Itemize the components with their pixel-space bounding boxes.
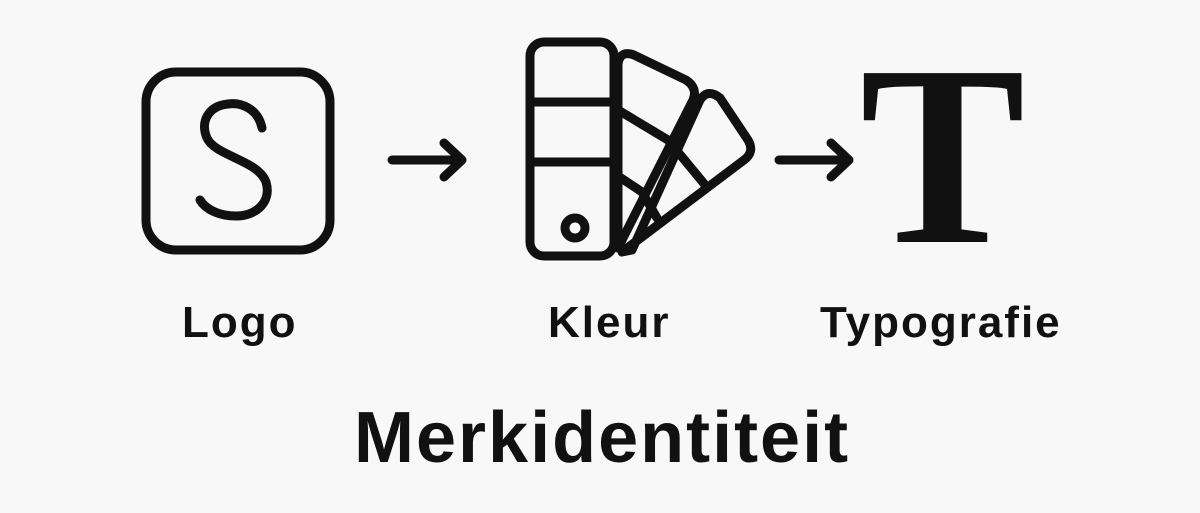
label: Logo: Logo [182,298,298,347]
title: Merkidentiteit: Merkidentiteit [354,398,850,478]
arrow: logo to kleur [392,143,462,177]
icon: logo square with S [146,72,330,250]
label: Typografie: Typografie [820,298,1062,347]
icon: colour swatch fan [530,42,751,256]
icon: serif T: T [860,12,1025,298]
label: Kleur: Kleur [548,298,670,347]
arrow: kleur to typografie [779,143,849,177]
